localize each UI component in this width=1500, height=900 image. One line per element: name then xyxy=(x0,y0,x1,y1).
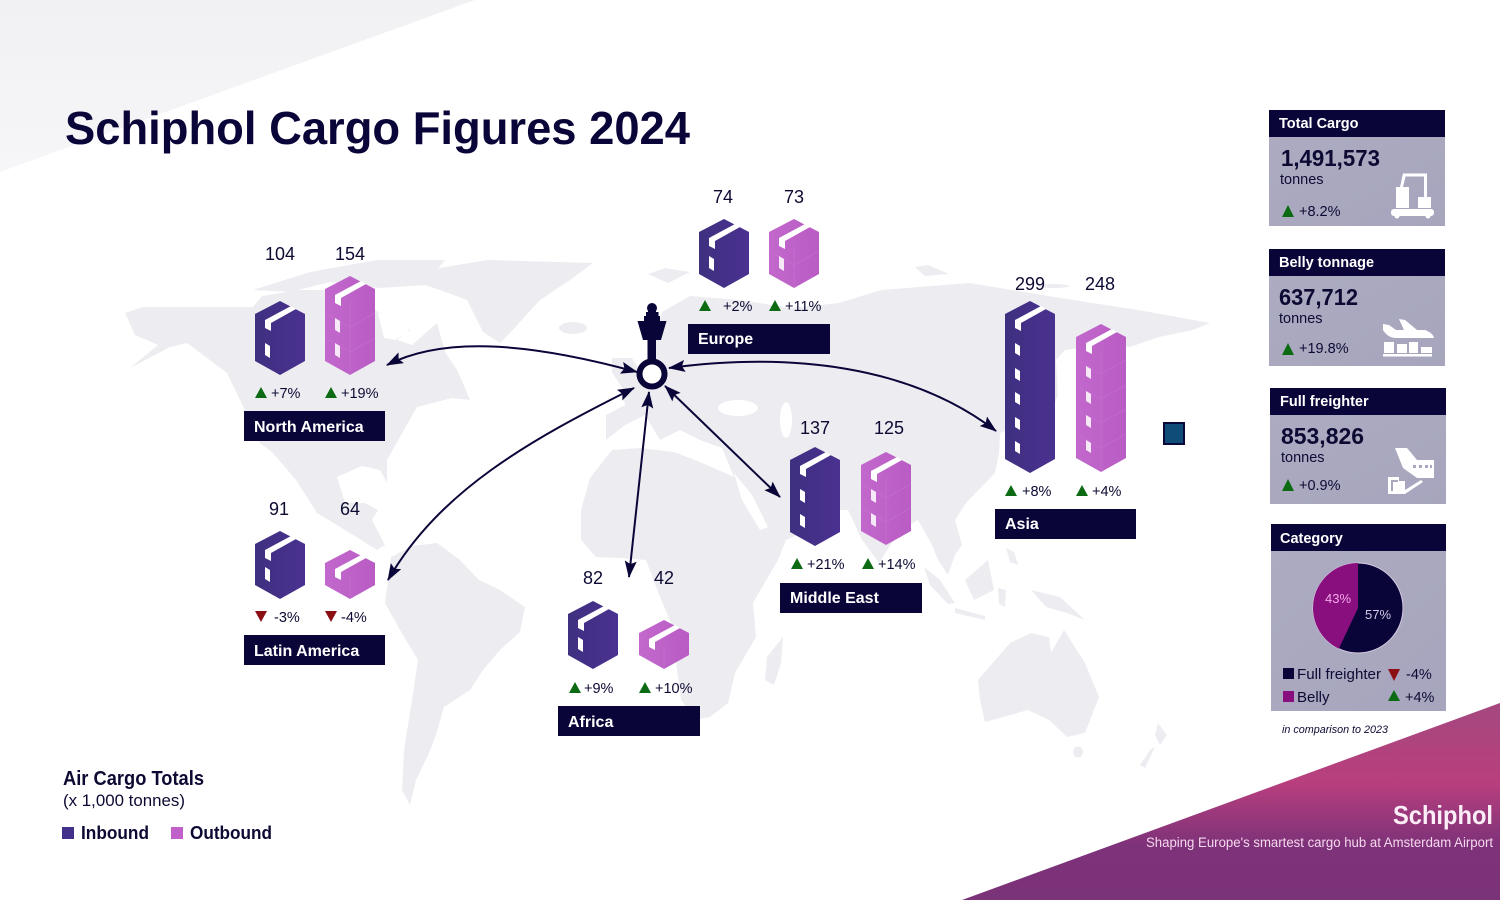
panel body xyxy=(1269,136,1445,226)
panel header: Category xyxy=(1280,531,1343,547)
note: comparison year: in comparison to 2023 xyxy=(1282,724,1389,736)
panel: Total Cargo xyxy=(1269,110,1445,226)
seas on map xyxy=(378,313,792,530)
inbound change xyxy=(1005,484,1052,500)
outbound change xyxy=(769,299,822,315)
region label: North America xyxy=(254,419,364,436)
outbound change xyxy=(325,386,379,402)
region label: Asia xyxy=(1005,516,1039,533)
panel: Europe xyxy=(688,187,830,354)
inbound change: +2% xyxy=(723,299,753,315)
panel: North America xyxy=(244,244,385,441)
outbound change: -4% xyxy=(341,610,367,626)
panel: Africa xyxy=(558,568,700,736)
region label: Africa xyxy=(568,714,613,731)
panel: Middle East xyxy=(780,418,922,613)
Sulawesi xyxy=(998,588,1006,607)
outbound box xyxy=(861,452,911,545)
inbound change xyxy=(699,299,753,315)
legend: air cargo totals xyxy=(62,768,272,843)
panel: Full freighter xyxy=(1270,388,1446,504)
inbound change xyxy=(791,557,845,573)
legend: belly xyxy=(1283,689,1435,706)
brand name: Schiphol xyxy=(1393,800,1493,830)
arrow: Asia link xyxy=(669,362,996,431)
region label xyxy=(780,583,922,613)
outbound change xyxy=(862,557,916,573)
panel: Belly tonnage xyxy=(1269,249,1445,366)
panel body xyxy=(1269,276,1445,366)
total value: 1,491,573 xyxy=(1281,145,1380,171)
pie chart: 43% xyxy=(1325,591,1351,606)
outbound change xyxy=(639,681,693,697)
region label xyxy=(558,706,700,736)
change: +19.8% xyxy=(1299,341,1349,357)
region label xyxy=(244,411,385,441)
icon: Schiphol control tower hub xyxy=(638,303,666,386)
inbound change: +8% xyxy=(1022,484,1052,500)
outbound change: +4% xyxy=(1092,484,1122,500)
Svalbard xyxy=(648,268,690,283)
New Zealand xyxy=(1155,723,1167,745)
pie chart xyxy=(1313,563,1403,653)
region label xyxy=(995,509,1136,539)
inbound box xyxy=(790,447,840,546)
panel header xyxy=(1270,388,1446,415)
change: +8.2% xyxy=(1299,204,1341,220)
Greenland xyxy=(410,260,593,343)
legend: full freighter xyxy=(1283,666,1432,683)
teal square xyxy=(1164,423,1184,444)
Arctic archipelago xyxy=(253,260,445,292)
panel header: Belly tonnage xyxy=(1279,255,1374,271)
inbound change xyxy=(255,610,300,626)
belly value: 637,712 xyxy=(1279,284,1358,310)
inbound value: 137 xyxy=(800,418,830,438)
outbound value: 42 xyxy=(654,568,674,588)
icon: nose-loading freighter xyxy=(1388,448,1434,494)
region label: Middle East xyxy=(790,590,880,607)
pie chart: 57% xyxy=(1365,607,1391,622)
legend: inbound: Inbound xyxy=(81,823,149,843)
region label: Europe xyxy=(698,331,753,348)
panel: Category xyxy=(1271,524,1446,711)
outbound change: +11% xyxy=(785,299,822,315)
inbound change xyxy=(569,681,614,697)
inbound value: 91 xyxy=(269,499,289,519)
Sumatra xyxy=(924,567,955,604)
Arctic Russia islands xyxy=(915,265,949,276)
Australia xyxy=(978,630,1099,737)
unit: tonnes xyxy=(1280,172,1324,188)
unit: tonnes xyxy=(1279,311,1323,327)
outbound box xyxy=(769,219,819,288)
inbound change: +21% xyxy=(807,557,845,573)
inbound value: 82 xyxy=(583,568,603,588)
outbound change xyxy=(1076,484,1122,500)
region label xyxy=(688,324,830,354)
panel header: Full freighter xyxy=(1280,394,1369,410)
inbound change: -3% xyxy=(274,610,300,626)
outbound value: 73 xyxy=(784,187,804,207)
icon: inner box mark xyxy=(1391,480,1398,491)
Borneo xyxy=(965,560,994,600)
footer banner xyxy=(962,703,1500,900)
outbound box xyxy=(325,276,375,375)
arrow: Middle East link xyxy=(665,386,780,497)
legend heading: Air Cargo Totals xyxy=(63,768,204,790)
Java xyxy=(955,608,985,620)
region label: Latin America xyxy=(254,643,359,660)
panel: Asia xyxy=(995,274,1136,539)
inbound change xyxy=(255,386,301,402)
arrow: North America link xyxy=(387,346,637,372)
outbound change: +10% xyxy=(655,681,693,697)
inbound box xyxy=(699,219,749,288)
panel body xyxy=(1271,550,1446,711)
arrow: Latin America link xyxy=(388,388,634,580)
South America xyxy=(385,543,525,805)
inbound value: 299 xyxy=(1015,274,1045,294)
inbound box xyxy=(255,301,305,375)
Africa xyxy=(581,448,786,720)
title: Schiphol Cargo Figures 2024 xyxy=(65,102,690,154)
legend unit: (x 1,000 tonnes) xyxy=(63,792,185,810)
icon: cargo dolly xyxy=(1391,174,1434,218)
panel header xyxy=(1269,110,1445,137)
change: +0.9% xyxy=(1299,478,1341,494)
background corner: top-left xyxy=(0,0,475,172)
legend: belly: +4% xyxy=(1405,690,1435,706)
legend: outbound: Outbound xyxy=(190,823,272,843)
outbound value: 125 xyxy=(874,418,904,438)
outbound change xyxy=(325,610,367,626)
panel body xyxy=(1270,414,1446,504)
outbound value: 154 xyxy=(335,244,365,264)
inbound box xyxy=(568,601,618,669)
legend: belly: Belly xyxy=(1297,689,1330,706)
outbound box xyxy=(639,620,689,669)
inbound value: 104 xyxy=(265,244,295,264)
New Guinea xyxy=(1031,590,1085,620)
inbound value: 74 xyxy=(713,187,733,207)
outbound value: 64 xyxy=(340,499,360,519)
inbound box xyxy=(1005,301,1055,473)
outbound change: +14% xyxy=(878,557,916,573)
Iceland xyxy=(559,322,587,334)
Madagascar xyxy=(765,637,783,685)
North America xyxy=(125,290,470,550)
panel header: Total Cargo xyxy=(1279,116,1359,132)
panel header xyxy=(1269,249,1445,276)
panel header xyxy=(1271,524,1446,551)
legend: full freighter: Full freighter xyxy=(1297,666,1381,683)
tagline: Shaping Europe's smartest cargo hub at Amsterdam Airport xyxy=(1146,835,1493,850)
world map xyxy=(125,260,1210,805)
Eurasia xyxy=(606,283,1210,575)
panel: Latin America xyxy=(244,499,385,665)
icon: window dots xyxy=(1413,465,1432,468)
outbound box xyxy=(325,550,375,599)
legend: full freighter: -4% xyxy=(1406,667,1432,683)
unit: tonnes xyxy=(1281,450,1325,466)
arrow: Africa link xyxy=(629,392,649,577)
icon: passenger plane with cargo xyxy=(1383,319,1434,356)
inbound box xyxy=(255,531,305,599)
inbound change: +9% xyxy=(584,681,614,697)
region label xyxy=(244,635,385,665)
Tasmania xyxy=(1073,746,1083,758)
freighter value: 853,826 xyxy=(1281,423,1364,449)
outbound change: +19% xyxy=(341,386,379,402)
outbound value: 248 xyxy=(1085,274,1115,294)
Philippines xyxy=(1006,548,1018,565)
inbound change: +7% xyxy=(271,386,301,402)
outbound box xyxy=(1076,324,1126,472)
